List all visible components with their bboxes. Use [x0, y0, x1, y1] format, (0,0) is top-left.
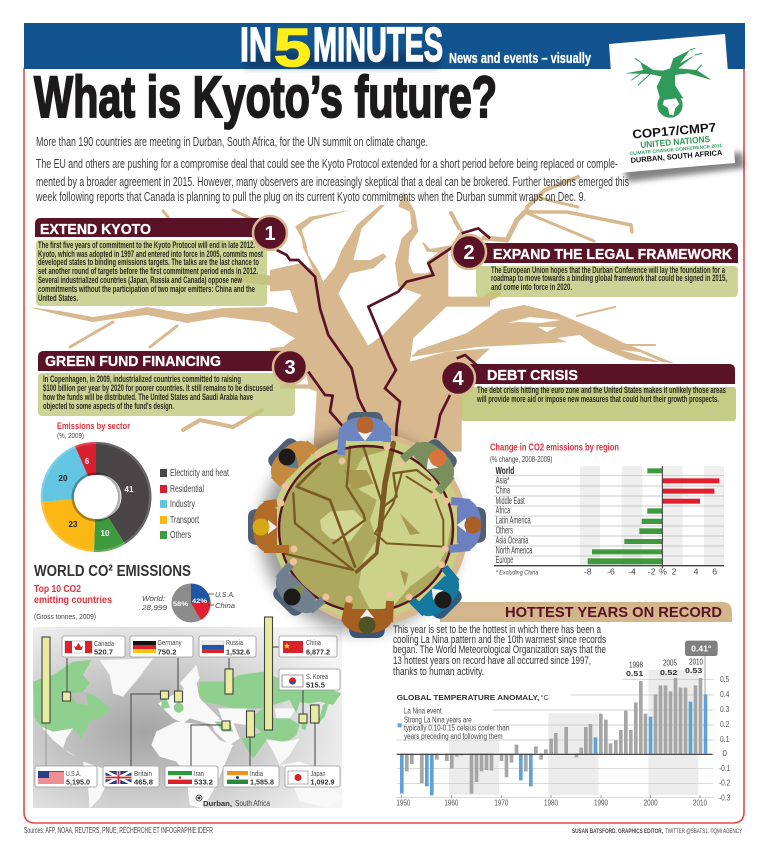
country label: USA: 5,195.0 — [66, 780, 90, 786]
bar chart: change in CO2 emissions by region: * Excluding China — [496, 569, 539, 576]
body text — [43, 374, 273, 411]
country label: Britain — [103, 766, 159, 787]
country label: Japan — [285, 766, 340, 787]
subheading: top 10: Top 10 CO2 — [34, 584, 81, 595]
temperature anomaly chart: 0.52 — [660, 668, 677, 677]
y-axis labels: -0.3 — [719, 792, 731, 802]
bar chart: change in CO2 emissions by region: -4 — [628, 567, 636, 577]
body text: Several industrialized countries (Japan, Russia and Canada) oppose new — [38, 275, 243, 285]
donut chart: emissions by sector: 20 — [59, 474, 68, 483]
callouts — [704, 656, 706, 695]
emission columns — [42, 617, 319, 737]
donut legend: Industry — [170, 499, 195, 510]
sources footer: Sources: AFP, NOAA, REUTERS, PNUE; RECHERCHE ET INFOGRAPHIE:IDEFR — [24, 826, 213, 835]
donut legend: Residential — [170, 484, 204, 495]
country label: China: China — [306, 638, 322, 647]
person: upper right — [395, 430, 467, 502]
subheading: top 10: emitting countries — [34, 595, 112, 606]
donut chart: emissions by sector: 10 — [101, 529, 110, 538]
La Nina legend: typically 0.10-0.15 celsius cooler than — [404, 724, 509, 733]
country label: Iran: 533.2 — [194, 780, 213, 786]
bar chart: change in CO2 emissions by region: (% change, 2008-2009) — [490, 455, 553, 464]
bar chart: change in CO2 emissions by region: Asia* — [496, 475, 509, 486]
pie: world share: U.S.A. — [215, 592, 235, 599]
continents in white — [41, 658, 343, 808]
bar chart: change in CO2 emissions by region: 4 — [694, 567, 699, 577]
number 2 — [452, 235, 486, 269]
country label: Russia: Russia — [226, 638, 244, 647]
body text: In Copenhagen, in 2009, industrialized countries committed to raising — [43, 374, 241, 384]
donut chart: emissions by sector — [41, 421, 151, 552]
Durban marker: Durban, — [203, 799, 232, 808]
bar chart: change in CO2 emissions by region: Asia Oceania — [496, 535, 529, 546]
bar chart: change in CO2 emissions by region: -8 — [584, 567, 592, 577]
La Nina legend — [398, 706, 509, 741]
country label: India: India — [250, 769, 264, 778]
country label: USA: U.S.A. — [66, 769, 81, 778]
x-axis labels — [396, 795, 707, 808]
x-axis labels: 1950 — [396, 798, 411, 808]
body text: United States. — [38, 293, 78, 303]
country label: Britain: Britain — [134, 769, 152, 778]
header wordmark — [240, 18, 443, 78]
panel: debt crisis — [441, 361, 736, 421]
donut chart: emissions by sector: Emissions by sector — [57, 421, 130, 432]
credit footer: SUSAN BATSFORD, GRAPHICS EDITOR, — [572, 828, 663, 835]
temperature anomaly chart: °C — [541, 694, 549, 702]
number 4 — [441, 361, 475, 395]
country label: Canada: Canada — [94, 639, 115, 648]
logo text: UNITED NATIONS — [640, 134, 710, 150]
body text: The first five years of commitment to the Kyoto Protocol will end in late 2012. — [38, 240, 255, 250]
intro text — [35, 134, 629, 204]
country label: South Korea: S. Korea — [306, 672, 329, 681]
body text: Kyoto, which was adopted in 1997 and entered into force in 2005, commits most — [38, 249, 263, 259]
country label: Russia: 1,532.6 — [226, 650, 250, 656]
country label: China: 6,877.2 — [306, 650, 330, 656]
panel: green fund financing: GREEN FUND FINANCING — [45, 353, 221, 370]
person: upper left — [260, 428, 323, 492]
panel: expand the legal framework — [452, 235, 738, 297]
body text: commitments without the participation of two major emitters: China and the — [38, 284, 255, 294]
y-axis labels: 0 — [722, 748, 727, 758]
country label: Iran: Iran — [194, 769, 204, 778]
bar chart: change in CO2 emissions by region: North America — [496, 545, 533, 556]
country label: South Korea: 515.5 — [306, 682, 325, 690]
bar chart: change in CO2 emissions by region: -6 — [607, 567, 615, 577]
table rim ring — [279, 446, 453, 612]
x-axis labels: 2010 — [693, 798, 707, 808]
y-axis labels: -0.2 — [719, 777, 731, 787]
pie: world share — [141, 584, 235, 622]
country label: South Korea — [279, 669, 340, 690]
country label: Japan: Japan — [310, 769, 326, 778]
bar chart: change in CO2 emissions by region: Latin America — [496, 515, 531, 526]
donut legend: Transport — [170, 515, 199, 526]
logo text — [627, 120, 724, 165]
table globe with negotiators — [248, 412, 486, 638]
chart heading: GLOBAL TEMPERATURE ANOMALY, — [397, 695, 539, 702]
x-axis labels: 1970 — [494, 798, 509, 808]
body text: objected to some aspects of the fund's design. — [43, 401, 174, 411]
panel: extend Kyoto: EXTEND KYOTO — [40, 221, 151, 238]
bar chart: change in CO2 emissions by region: Change in CO2 emissions by region — [490, 443, 619, 454]
y-axis labels: 0.1 — [720, 734, 730, 744]
y-axis labels: 0.3 — [720, 704, 730, 714]
bar chart: change in CO2 emissions by region: -2 — [648, 567, 656, 577]
logo text: CLIMATE CHANGE CONFERENCE 2011 — [629, 143, 723, 156]
panel: debt crisis: DEBT CRISIS — [487, 367, 578, 384]
person: lower left — [263, 557, 332, 626]
La Nina legend: years preceding and following them — [404, 732, 503, 741]
pie: world share: 28,999 — [141, 605, 167, 612]
bar chart: change in CO2 emissions by region — [490, 443, 724, 577]
Durban marker — [196, 795, 270, 808]
hottest years text: began. The World Meteorological Organization says that the — [393, 644, 606, 656]
tree illustration — [28, 177, 674, 452]
subheading: top 10: (Gross tonnes, 2009) — [34, 612, 96, 621]
body text: developed states to binding emissions targets. The talks are the last chance to — [38, 257, 259, 267]
temperature anomaly chart: 0.51 — [626, 669, 643, 678]
panel: extend Kyoto — [35, 216, 287, 306]
number 1: 1 — [264, 223, 276, 245]
La Nina legend: La Nina event — [404, 706, 442, 715]
bar chart: change in CO2 emissions by region: Europe — [496, 555, 513, 566]
hottest years text: This year is set to be the hottest in which there has been a — [393, 624, 602, 636]
y-axis labels — [719, 674, 731, 802]
countries in green — [33, 660, 341, 758]
logo text: COP17/CMP7 — [632, 120, 717, 142]
hottest years text: 13 hottest years on record have all occurred since 1997, — [393, 655, 591, 667]
y-axis labels: 0.5 — [720, 674, 730, 684]
bar chart: change in CO2 emissions by region: Africa — [496, 506, 511, 517]
temperature anomaly chart: 2010 — [689, 656, 703, 666]
person: left — [248, 500, 298, 552]
y-axis labels: 0.2 — [720, 719, 730, 729]
y-axis labels: -0.1 — [719, 763, 731, 773]
logo text: DURBAN, SOUTH AFRICA — [630, 148, 723, 165]
bar chart: change in CO2 emissions by region: Others — [496, 525, 513, 536]
temperature anomaly chart: 0.41° — [691, 644, 712, 654]
hottest years text: thanks to human activity. — [393, 666, 484, 678]
country label: Japan: 1,092.9 — [310, 780, 335, 786]
pie: world share: 58% — [173, 601, 188, 608]
COP17 logo card — [609, 34, 745, 182]
body text — [491, 265, 727, 292]
country label: Germany — [130, 636, 193, 657]
country label: Canada: 520.7 — [94, 650, 113, 656]
country label: Iran — [165, 766, 218, 787]
temperature anomaly chart: 0.53 — [685, 666, 702, 675]
body text: set another round of targets before the first commitment period ends in 2012. — [38, 266, 258, 276]
title: What is Kyoto’s future? — [34, 65, 497, 130]
body text — [476, 385, 726, 404]
bar chart: change in CO2 emissions by region: 2 — [672, 567, 677, 577]
temperature anomaly chart — [396, 641, 731, 808]
pie: world share: China — [215, 603, 235, 610]
hottest years text — [393, 624, 606, 678]
pie: world share: World: — [142, 596, 165, 603]
pie: world share: 42% — [192, 598, 207, 605]
header wordmark: 5 — [274, 18, 311, 78]
baobab logo — [625, 48, 712, 118]
country label: China — [279, 636, 337, 657]
Durban marker: South Africa — [235, 799, 270, 808]
bar chart: change in CO2 emissions by region: World — [496, 466, 514, 477]
number 3: 3 — [284, 357, 296, 379]
bar chart: change in CO2 emissions by region: 6 — [712, 567, 717, 577]
donut chart: emissions by sector: (%, 2009) — [57, 431, 84, 440]
blue La Nina bars — [400, 694, 707, 795]
temperature anomaly chart: 2005 — [663, 658, 677, 668]
heading: world CO2 emissions: WORLD CO² EMISSIONS — [34, 563, 191, 580]
x-axis labels: 1960 — [444, 798, 459, 808]
bar chart: change in CO2 emissions by region: % — [659, 567, 667, 577]
number 4: 4 — [452, 368, 464, 390]
donut legend — [160, 468, 229, 541]
donut chart: emissions by sector: 41 — [125, 485, 134, 494]
x-axis labels: 2000 — [644, 798, 658, 808]
number 2: 2 — [463, 242, 475, 264]
globe — [272, 437, 462, 619]
panel: green fund financing — [38, 350, 307, 416]
body text: $100 billion per year by 2020 for poorer countries. It still remains to be discussed — [43, 383, 273, 393]
country label: India: 1,585.8 — [250, 780, 274, 786]
intro text: More than 190 countries are meeting in Durban, South Africa, for the UN summit on climate change. — [36, 134, 428, 149]
person: lower right — [404, 560, 472, 627]
header wordmark: MINUTES — [313, 19, 443, 72]
country label: India — [223, 766, 279, 787]
donut legend: Others — [170, 530, 191, 541]
body text — [38, 240, 263, 303]
maroon vein lines — [277, 228, 490, 442]
world map — [33, 617, 343, 808]
country label: Britain: 465.8 — [134, 780, 153, 786]
gray bars — [405, 678, 702, 794]
hottest years text: cooling La Nina pattern and the 10th warmest since records — [393, 634, 606, 646]
header tagline: News and events – visually — [449, 50, 591, 67]
country label: Russia — [199, 636, 256, 657]
hottest years header band — [440, 602, 732, 622]
number 1 — [253, 216, 287, 250]
y-axis labels: 0.4 — [720, 689, 730, 699]
x-axis labels: 1980 — [544, 798, 558, 808]
country label: Canada — [62, 636, 125, 657]
credit footer — [572, 827, 742, 835]
bar chart: change in CO2 emissions by region: China — [496, 486, 510, 497]
bar chart: change in CO2 emissions by region: Middle East — [496, 496, 525, 507]
person: right — [442, 498, 486, 552]
panel: expand the legal framework: EXPAND THE LEGAL FRAMEWORK — [493, 246, 732, 263]
person: top — [338, 412, 390, 464]
x-axis labels: 1990 — [594, 798, 608, 808]
hottest years header band: HOTTEST YEARS ON RECORD — [505, 604, 722, 621]
donut chart: emissions by sector: 6 — [85, 457, 90, 466]
country label: Germany: 750.2 — [158, 650, 177, 656]
country label: Germany: Germany — [158, 638, 182, 647]
body text: and come into force in 2020. — [491, 282, 572, 292]
subheading: top 10 — [34, 584, 112, 621]
connector lines — [46, 647, 315, 766]
header band — [24, 18, 745, 78]
donut legend: Electricity and heat — [170, 468, 229, 479]
donut chart: emissions by sector: 23 — [69, 520, 78, 529]
body text: how the funds will be distributed. The United States and Saudi Arabia have — [43, 392, 253, 402]
country label: USA — [35, 766, 97, 787]
header wordmark: IN — [240, 19, 272, 72]
number 3 — [273, 350, 307, 384]
temperature anomaly chart: 1998 — [629, 659, 643, 669]
person: bottom — [342, 592, 394, 638]
La Nina legend: Strong La Nina years are — [404, 715, 472, 724]
